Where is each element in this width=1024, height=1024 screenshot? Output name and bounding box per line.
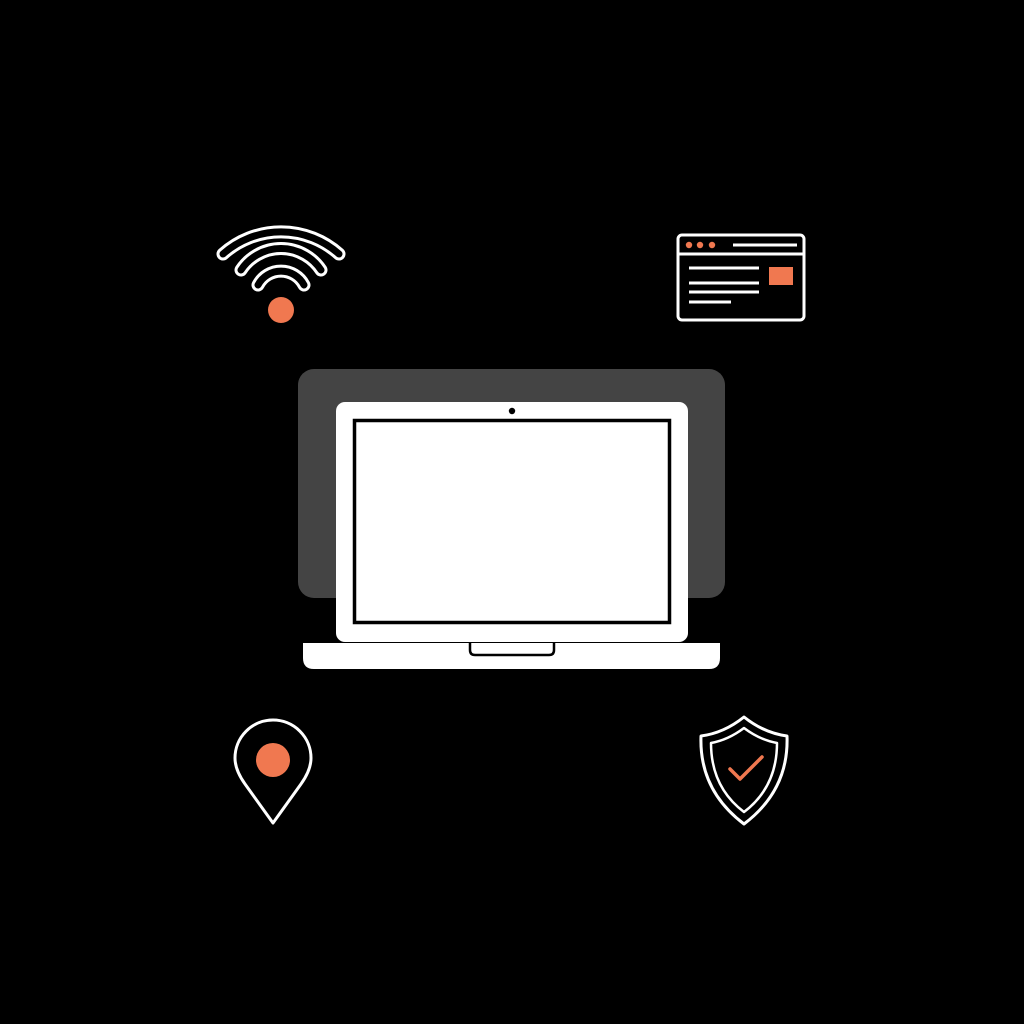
icon: wifi (223, 232, 339, 323)
laptop (303, 402, 720, 669)
icon: shield with check (701, 717, 787, 824)
icon: browser window (678, 235, 804, 320)
icon: location pin (235, 720, 311, 823)
panel: grey backdrop (298, 369, 725, 598)
